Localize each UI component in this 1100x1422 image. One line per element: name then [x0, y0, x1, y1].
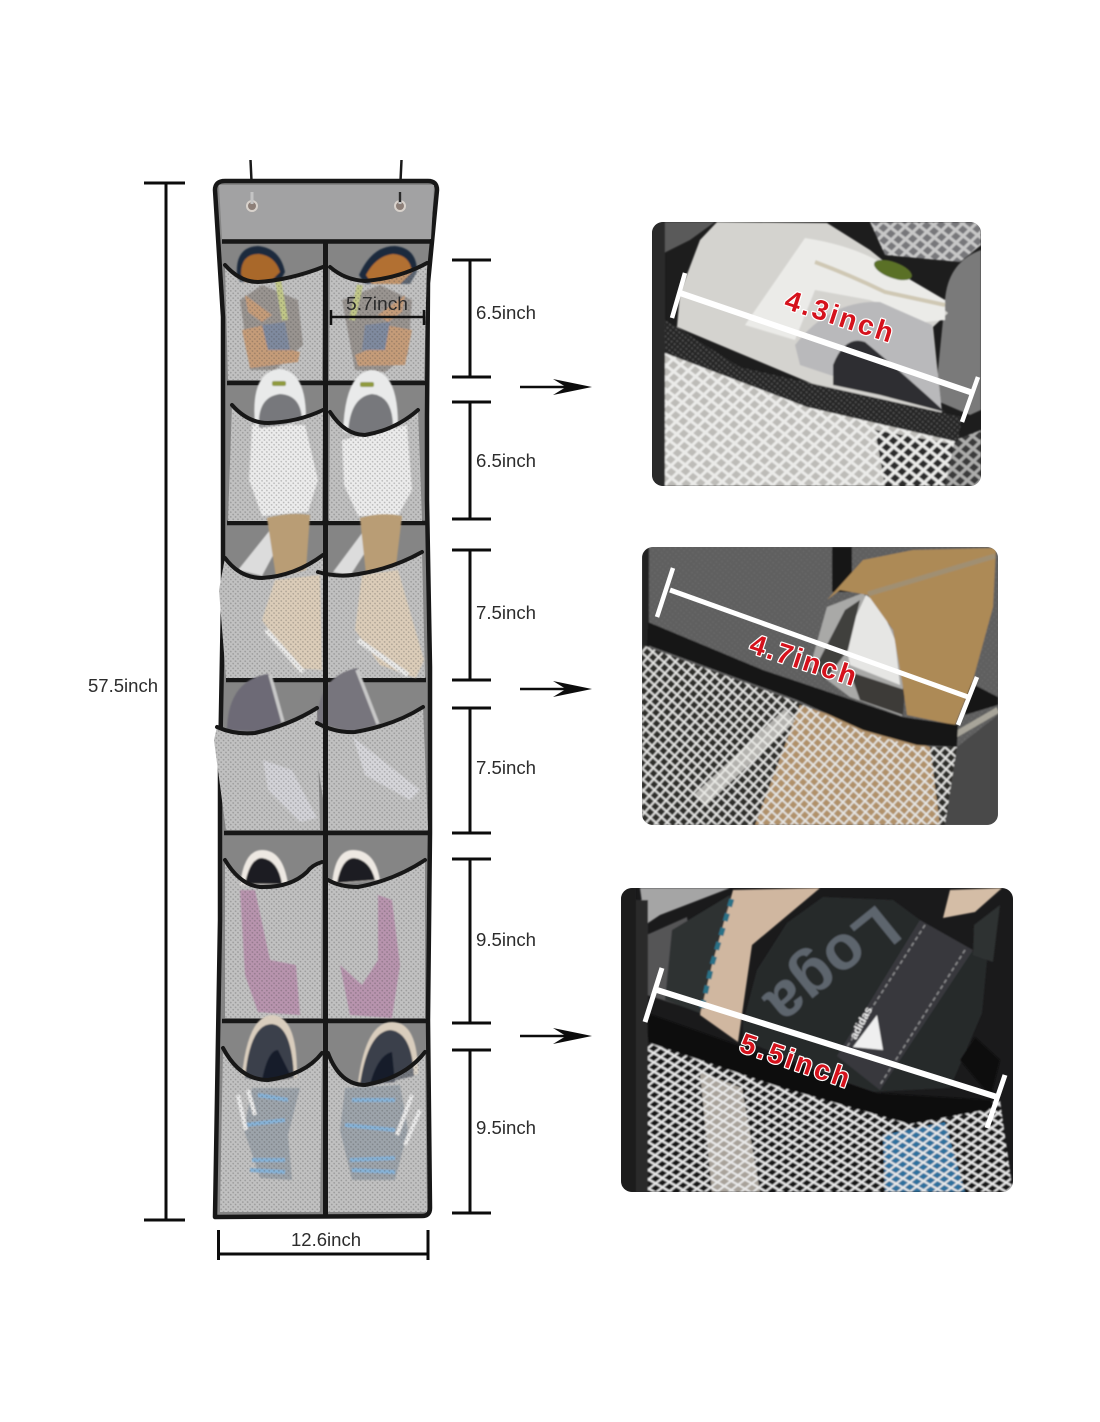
grommet hooks: [247, 192, 405, 211]
row 4 pockets and shoes: [214, 668, 428, 830]
panel: high heel pocket detail 4.7inch: [642, 547, 998, 825]
pocket height dimensions: 9.5inch: [476, 1118, 536, 1138]
pocket height dimensions: 9.5inch: [476, 930, 536, 950]
hanging straps: [250, 160, 402, 181]
pocket height dimensions: 7.5inch: [476, 603, 536, 623]
pocket height dimensions: 6.5inch: [476, 451, 536, 471]
measurement label: 5.5inch: [736, 1027, 854, 1094]
pocket height dimensions: 6.5inch: [476, 303, 536, 323]
overall height dimension: [88, 183, 185, 1220]
binding: [647, 1013, 1000, 1124]
tan soles: [700, 888, 820, 1042]
centre vertical seam: [323, 243, 328, 1215]
adidas badge: [848, 1005, 883, 1050]
panel: trainer pocket detail 5.5inch: [621, 888, 1013, 1192]
top header fabric: [219, 185, 434, 239]
pocket binding: [665, 320, 962, 442]
overall height dimension: 57.5inch: [88, 676, 158, 696]
overall width dimension: [218, 1230, 428, 1260]
overall width dimension: 12.6inch: [291, 1230, 361, 1250]
shoe logo lettering: Loga: [752, 892, 913, 1040]
pocket bindings: [217, 263, 427, 1085]
mesh front: [642, 645, 957, 825]
arrow: to trainer detail: [520, 1028, 592, 1044]
silver heel: [810, 593, 903, 716]
panel: hanging shoe organizer: [214, 160, 437, 1217]
arrow: to sneaker detail: [520, 379, 592, 395]
pocket height dimensions: [452, 260, 536, 1213]
measurement line: [657, 990, 997, 1097]
background mesh and grey shoe: [870, 222, 981, 262]
row 6 pockets and shoes: [220, 1015, 427, 1212]
row 3 pockets and shoes: [219, 514, 425, 678]
row 5 pockets and shoes: [225, 850, 425, 1018]
organizer fabric body: [215, 181, 437, 1217]
mesh front: [635, 1038, 1013, 1192]
measurement line: [680, 293, 973, 393]
adidas badge: adidas: [848, 1005, 875, 1041]
horizontal seam bars: [222, 242, 431, 1021]
white sneaker: [677, 222, 948, 415]
measurement line: [670, 590, 968, 697]
infographic canvas: [88, 160, 1013, 1260]
measurement label: 4.3inch: [781, 284, 897, 348]
pocket height dimensions: 7.5inch: [476, 758, 536, 778]
panel: sneaker pocket detail 4.3inch: [652, 222, 981, 486]
arrow: to high heel detail: [520, 681, 592, 697]
row 2 pockets and shoes: [228, 369, 422, 521]
row 1 pockets and shoes: [225, 246, 427, 380]
pocket width dimension: [331, 294, 424, 325]
black trainer: [743, 897, 987, 1092]
measurement label: 4.7inch: [746, 628, 860, 692]
binding: [647, 622, 958, 747]
pocket mesh front: [664, 354, 956, 486]
pocket width dimension: 5.7inch: [346, 294, 408, 314]
gold heel: [827, 548, 996, 725]
